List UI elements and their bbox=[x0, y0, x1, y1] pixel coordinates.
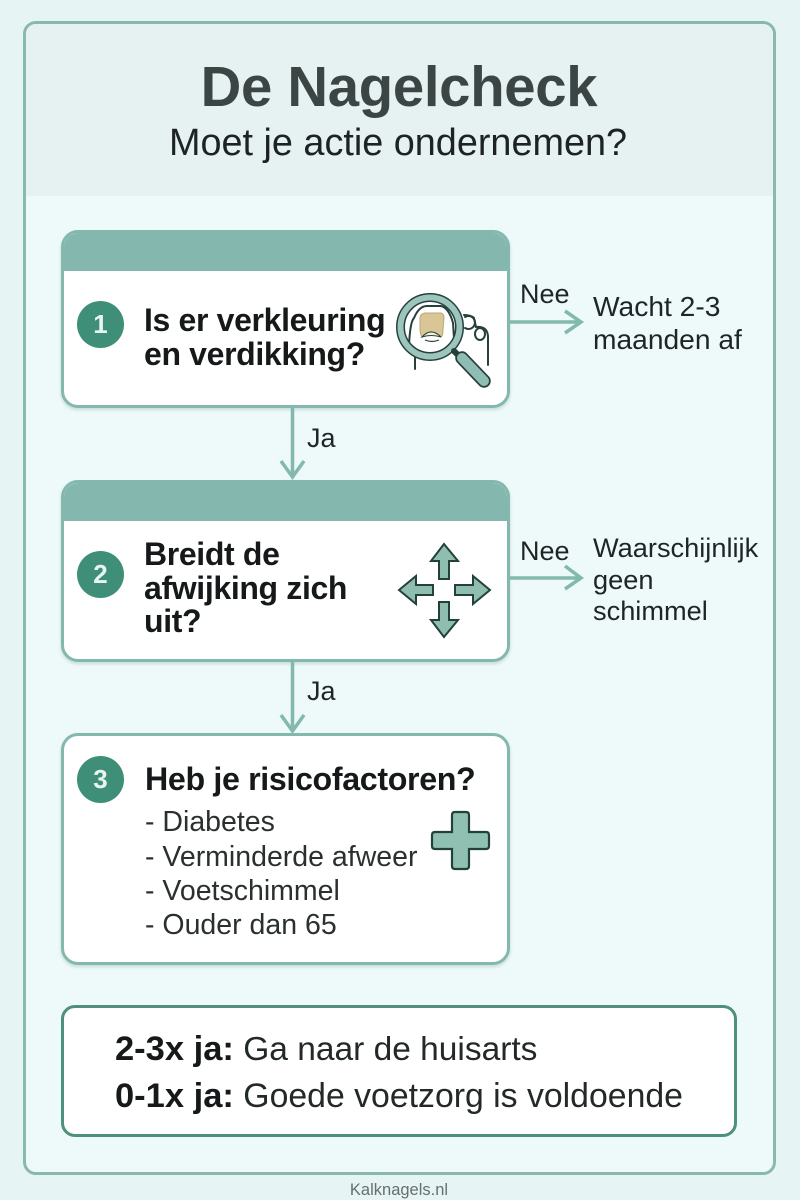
panel: conclusion bbox=[61, 1005, 737, 1137]
risk factor list: - Voetschimmel bbox=[145, 875, 340, 907]
step 3 number bbox=[77, 756, 124, 803]
conclusion line 2: 0-1x ja: Goede voetzorg is voldoende bbox=[115, 1077, 683, 1115]
label: nee 2: Nee bbox=[520, 536, 570, 566]
panel: step 1 bbox=[61, 230, 510, 408]
footer credit: Kalknagels.nl bbox=[350, 1181, 448, 1199]
label: nee 1: Nee bbox=[520, 279, 570, 309]
step 2 question: Breidt de bbox=[144, 536, 280, 572]
subtitle: Moet je actie ondernemen? bbox=[169, 122, 627, 164]
step 1 band bbox=[61, 230, 510, 271]
step 2 question bbox=[144, 536, 347, 639]
step 2 number bbox=[77, 551, 124, 598]
label: ja 2: Ja bbox=[307, 676, 336, 706]
step 2 question: afwijking zich bbox=[144, 570, 347, 606]
step 2 question: uit? bbox=[144, 603, 201, 639]
step 2 band bbox=[61, 480, 510, 521]
step 3 number: 3 bbox=[93, 764, 108, 794]
step 1 question: en verdikking? bbox=[144, 336, 365, 372]
text: no fungus outcome: Waarschijnlijk bbox=[593, 532, 758, 563]
text: no fungus outcome bbox=[593, 532, 758, 626]
text: no fungus outcome: geen bbox=[593, 564, 653, 594]
step 1 question: Is er verkleuring bbox=[144, 302, 385, 338]
text: no fungus outcome: schimmel bbox=[593, 595, 708, 626]
label: ja 1: Ja bbox=[307, 423, 336, 453]
step 1 number bbox=[77, 301, 124, 348]
step 2 number: 2 bbox=[93, 559, 108, 589]
panel: step 3 bbox=[61, 733, 510, 965]
header background bbox=[26, 24, 773, 196]
text: wait outcome: Wacht 2-3 bbox=[593, 290, 720, 322]
risk factor list: - Ouder dan 65 bbox=[145, 909, 337, 941]
arrow: step 2 to step 3 bbox=[280, 662, 306, 733]
step 1 number: 1 bbox=[93, 309, 108, 339]
text: wait outcome bbox=[593, 290, 742, 354]
icon: magnifier over toe nail bbox=[396, 293, 491, 388]
text: wait outcome: maanden af bbox=[593, 322, 742, 354]
step 3 question: Heb je risicofactoren? bbox=[145, 761, 475, 797]
risk factor list bbox=[145, 806, 417, 941]
arrow: step 1 nee bbox=[510, 310, 584, 334]
arrow: step 1 to step 2 bbox=[280, 408, 306, 480]
step 1 question bbox=[144, 302, 385, 372]
arrow: step 2 nee bbox=[510, 564, 584, 590]
title: De Nagelcheck bbox=[201, 55, 597, 118]
icon: medical cross bbox=[430, 810, 490, 870]
risk factor list: - Verminderde afweer bbox=[145, 841, 417, 873]
icon: four direction arrows bbox=[398, 542, 492, 639]
conclusion line 1: 2-3x ja: Ga naar de huisarts bbox=[115, 1030, 537, 1068]
panel: step 2 bbox=[61, 480, 510, 662]
risk factor list: - Diabetes bbox=[145, 806, 275, 838]
